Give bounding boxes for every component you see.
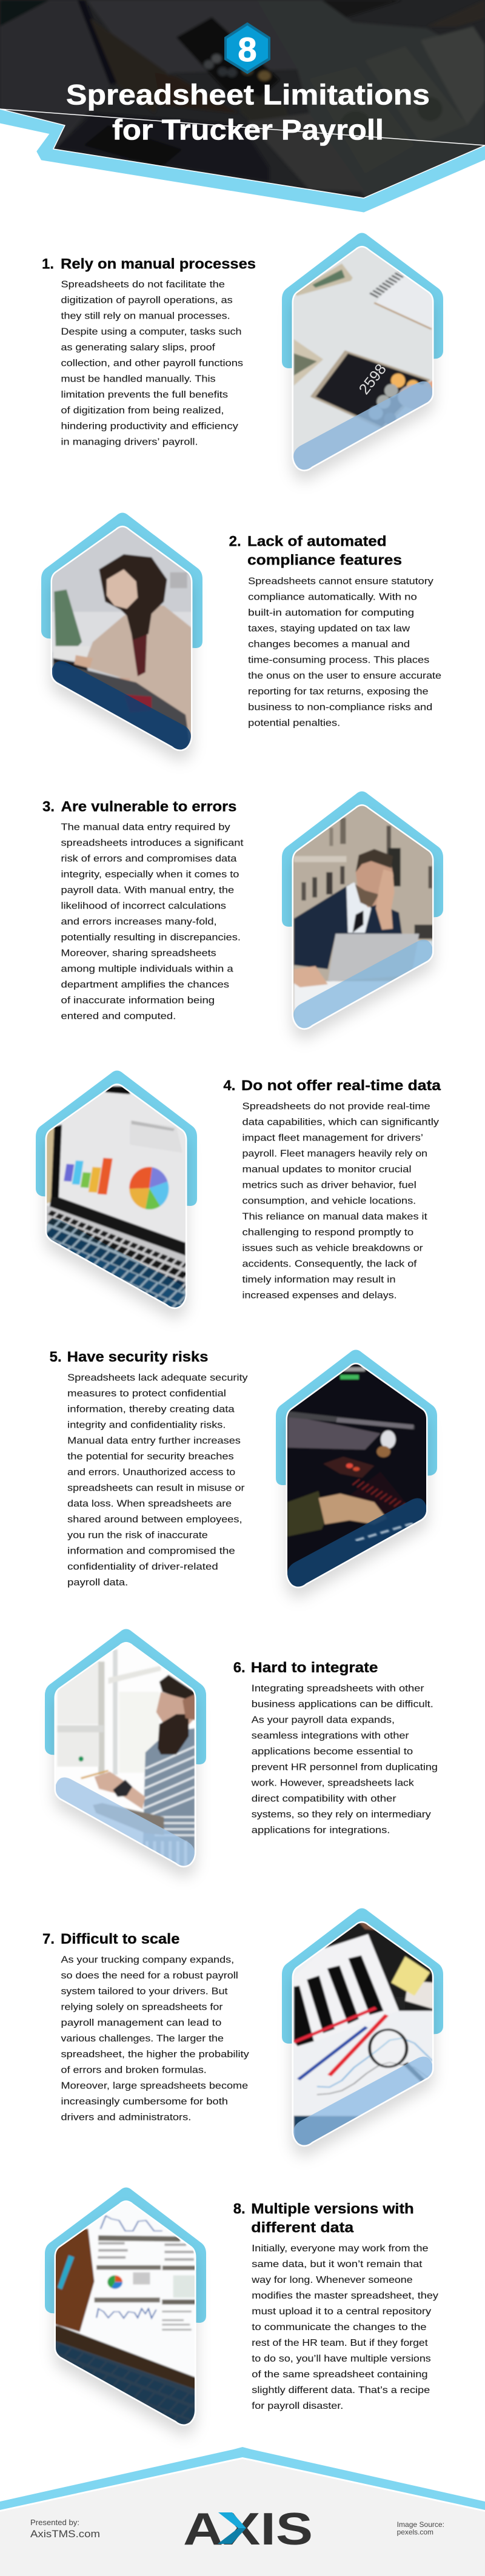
text block 3: payroll data. With manual entry, the <box>61 886 234 896</box>
panel: footer <box>0 2447 485 2576</box>
text block 4: issues such as vehicle breakdowns or <box>242 1243 423 1254</box>
text block 4: impact fleet management for drivers’ <box>242 1133 423 1144</box>
heading 2: 2. <box>229 534 241 550</box>
text block 1: collection, and other payroll functions <box>61 358 243 368</box>
text block 5: and errors. Unauthorized access to <box>67 1468 235 1478</box>
heading 5: 5. <box>50 1349 62 1365</box>
title <box>66 79 430 145</box>
heading 8: different data <box>251 2219 354 2236</box>
heading 3: Are vulnerable to errors <box>61 798 236 815</box>
text block 4: data capabilities, which can significantly <box>242 1117 439 1128</box>
text block 2: potential penalties. <box>248 718 340 728</box>
text block 3: Moreover, sharing spreadsheets <box>61 949 216 959</box>
heading 8 <box>233 2201 414 2236</box>
heading 2: compliance features <box>247 552 402 568</box>
footer accent band <box>0 2447 485 2576</box>
heading 4: Do not offer real-time data <box>241 1078 441 1094</box>
text block 4: This reliance on manual data makes it <box>242 1212 427 1222</box>
text block 8: way for long. Whenever someone <box>251 2275 413 2285</box>
text block 7: Moreover, large spreadsheets become <box>61 2081 248 2091</box>
text block 7 <box>61 1955 249 2123</box>
text block 5: integrity and confidentiality risks. <box>67 1420 226 1431</box>
text block 7: of errors and broken formulas. <box>61 2065 207 2076</box>
header accent band <box>0 0 485 211</box>
text block 4: increased expenses and delays. <box>242 1291 397 1301</box>
text block 5: information, thereby creating data <box>67 1405 235 1415</box>
photo frame 6: bearded man at whiteboard <box>45 1623 206 1876</box>
text block 1: limitation prevents the full benefits <box>61 389 228 400</box>
text block 5: confidentiality of driver-related <box>67 1562 218 1572</box>
image source credit <box>397 2520 444 2537</box>
title: for Trucker Payroll <box>112 114 384 145</box>
text block 6: applications for integrations. <box>252 1826 390 1836</box>
text block 6: direct compatibility with other <box>252 1794 396 1804</box>
heading 1: 1. <box>42 256 54 272</box>
panel: item 7 difficult to scale <box>42 1908 446 2160</box>
header background photo <box>0 0 485 206</box>
text block 3: spreadsheets introduces a significant <box>61 838 244 849</box>
text block 3: of inaccurate information being <box>61 996 215 1006</box>
text block 8: same data, but it won’t remain that <box>252 2259 423 2270</box>
text block 1 <box>61 279 243 447</box>
text block 3: risk of errors and compromises data <box>61 854 236 864</box>
text block 1: digitization of payroll operations, as <box>61 295 233 305</box>
phone display digits: 2598 <box>356 361 390 398</box>
header photo edge <box>0 109 485 198</box>
text block 6 <box>251 1684 438 1836</box>
presented by credit: AxisTMS.com <box>30 2528 100 2540</box>
heading 7: Difficult to scale <box>61 1931 179 1947</box>
panel: item 8 multiple versions with different data <box>45 2188 438 2471</box>
photo frame 5: hands on keyboard in the dark <box>272 1345 439 1597</box>
text block 4: manual updates to monitor crucial <box>242 1165 412 1175</box>
text block 5: Spreadsheets lack adequate security <box>67 1373 248 1383</box>
text block 8: to communicate the changes to the <box>252 2322 427 2333</box>
text block 2: compliance automatically. With no <box>248 592 417 602</box>
text block 8: modifies the master spreadsheet, they <box>252 2291 438 2301</box>
photo frame 3: stressed man at laptop <box>278 787 446 1040</box>
text block 3: potentially resulting in discrepancies. <box>61 933 241 943</box>
heading 6: 6. <box>233 1660 246 1676</box>
heading 2 <box>229 534 402 568</box>
panel: item 1 rely on manual processes <box>42 230 446 483</box>
photo frame 7: printed charts with magnifier <box>278 1908 446 2160</box>
text block 6: As your payroll data expands, <box>252 1715 395 1726</box>
text block 7: system tailored to your drivers. But <box>61 1987 228 1997</box>
heading 6: Hard to integrate <box>251 1660 378 1676</box>
text block 5: you run the risk of inaccurate <box>67 1531 208 1541</box>
photo frame 8: tablet analytics report <box>45 2188 206 2439</box>
footer background <box>0 2457 485 2576</box>
text block 8: Initially, everyone may work from the <box>252 2243 429 2254</box>
text block 8: to do so, you’ll have multiple versions <box>252 2354 431 2364</box>
text block 8: rest of the HR team. But if they forget <box>252 2338 428 2348</box>
text block 8: for payroll disaster. <box>252 2401 343 2411</box>
presented by credit <box>30 2518 100 2540</box>
heading 7: 7. <box>42 1931 55 1947</box>
presented by credit: Presented by: <box>30 2518 79 2527</box>
text block 3: department amplifies the chances <box>61 980 229 990</box>
text block 3: and errors increases many-fold, <box>61 917 217 927</box>
text block 8: must upload it to a central repository <box>252 2306 431 2317</box>
text block 2: reporting for tax returns, exposing the <box>248 686 429 697</box>
badge: number 8: 8 <box>238 30 257 68</box>
text block 6: systems, so they rely on intermediary <box>252 1810 431 1820</box>
text block 4: consumption, and vehicle locations. <box>242 1196 416 1207</box>
text block 4: payroll. Fleet managers heavily rely on <box>242 1149 427 1159</box>
text block 8: of the same spreadsheet containing <box>252 2369 428 2380</box>
text block 6: applications become essential to <box>252 1747 413 1757</box>
panel: item 6 hard to integrate <box>45 1623 438 1876</box>
text block 7: various challenges. The larger the <box>61 2034 224 2044</box>
text block 7: so does the need for a robust payroll <box>61 1971 238 1981</box>
text block 1: Spreadsheets do not facilitate the <box>61 279 225 290</box>
text block 5: payroll data. <box>67 1578 128 1588</box>
text block 3: among multiple individuals within a <box>61 964 233 975</box>
photo frame 4: laptop with charts <box>36 1071 198 1320</box>
text block 3: entered and computed. <box>61 1012 176 1022</box>
text block 3: The manual data entry required by <box>61 823 230 833</box>
text block 5 <box>67 1373 248 1588</box>
text block 5: spreadsheets can result in misuse or <box>67 1483 245 1494</box>
text block 1: must be handled manually. This <box>61 374 216 384</box>
text block 6: seamless integrations with other <box>252 1731 409 1741</box>
panel: item 2 lack of automated compliance features <box>41 512 441 763</box>
image source credit: Image Source: <box>397 2520 444 2529</box>
text block 1: Despite using a computer, tasks such <box>61 326 241 337</box>
title: Spreadsheet Limitations <box>66 79 430 110</box>
text block 2 <box>248 576 441 728</box>
photo frame 1: phone calculator <box>278 230 446 483</box>
panel: item 4 do not offer real-time data <box>36 1071 441 1320</box>
text block 8: slightly different data. That’s a recipe <box>252 2385 430 2396</box>
text block 6: work. However, spreadsheets lack <box>251 1778 415 1789</box>
panel: item 3 are vulnerable to errors <box>42 787 446 1040</box>
text block 7: relying solely on spreadsheets for <box>61 2002 223 2013</box>
text block 5: information and compromised the <box>67 1546 235 1557</box>
text block 4: Spreadsheets do not provide real-time <box>242 1102 430 1112</box>
panel: item 5 have security risks <box>50 1345 439 1597</box>
text block 1: they still rely on manual processes. <box>61 311 230 321</box>
text block 2: time-consuming process. This places <box>248 655 429 665</box>
text block 3: likelihood of incorrect calculations <box>61 901 226 912</box>
text block 1: hindering productivity and efficiency <box>61 421 238 431</box>
text block 2: built-in automation for computing <box>248 608 414 618</box>
text block 3: integrity, especially when it comes to <box>61 870 239 880</box>
text block 7: spreadsheet, the higher the probability <box>61 2050 249 2060</box>
text block 5: shared around between employees, <box>67 1515 242 1525</box>
image source credit: pexels.com <box>397 2528 433 2537</box>
heading 4: 4. <box>223 1078 235 1094</box>
text block 2: business to non-compliance risks and <box>248 702 432 712</box>
text block 1: in managing drivers’ payroll. <box>61 437 198 447</box>
text block 2: Spreadsheets cannot ensure statutory <box>248 576 433 586</box>
heading 2: Lack of automated <box>247 534 387 550</box>
logo: AXIS: AXIS <box>183 2503 313 2554</box>
text block 7: drivers and administrators. <box>61 2113 191 2123</box>
heading 3: 3. <box>42 798 55 815</box>
text block 4: challenging to respond promptly to <box>242 1228 413 1238</box>
text block 2: taxes, staying updated on tax law <box>248 623 410 634</box>
text block 4 <box>242 1102 439 1301</box>
text block 2: changes becomes a manual and <box>248 639 410 649</box>
text block 3 <box>61 823 244 1022</box>
text block 5: the potential for security breaches <box>67 1452 234 1462</box>
photo frame 2: woman at laptop <box>41 512 202 763</box>
text block 6: business applications can be difficult. <box>252 1700 433 1710</box>
heading 1: Rely on manual processes <box>61 256 256 272</box>
text block 7: As your trucking company expands, <box>61 1955 234 1965</box>
text block 5: Manual data entry further increases <box>67 1436 241 1446</box>
text block 1: of digitization from being realized, <box>61 405 224 416</box>
text block 1: as generating salary slips, proof <box>61 342 215 353</box>
text block 7: increasingly cumbersome for both <box>61 2097 228 2107</box>
text block 5: measures to protect confidential <box>67 1389 226 1399</box>
text block 6: Integrating spreadsheets with other <box>252 1684 424 1694</box>
text block 2: the onus on the user to ensure accurate <box>248 670 441 681</box>
text block 8 <box>251 2243 438 2411</box>
text block 4: accidents. Consequently, the lack of <box>242 1259 417 1270</box>
text block 4: metrics such as driver behavior, fuel <box>242 1180 416 1191</box>
heading 5: Have security risks <box>67 1349 208 1365</box>
text block 4: timely information may result in <box>242 1275 396 1285</box>
badge: number 8 <box>225 23 270 73</box>
text block 7: payroll management can lead to <box>61 2018 221 2028</box>
heading 8: Multiple versions with <box>251 2201 414 2217</box>
text block 5: data loss. When spreadsheets are <box>67 1499 232 1509</box>
heading 8: 8. <box>233 2201 246 2217</box>
panel: header <box>0 0 485 211</box>
text block 6: prevent HR personnel from duplicating <box>252 1763 438 1773</box>
